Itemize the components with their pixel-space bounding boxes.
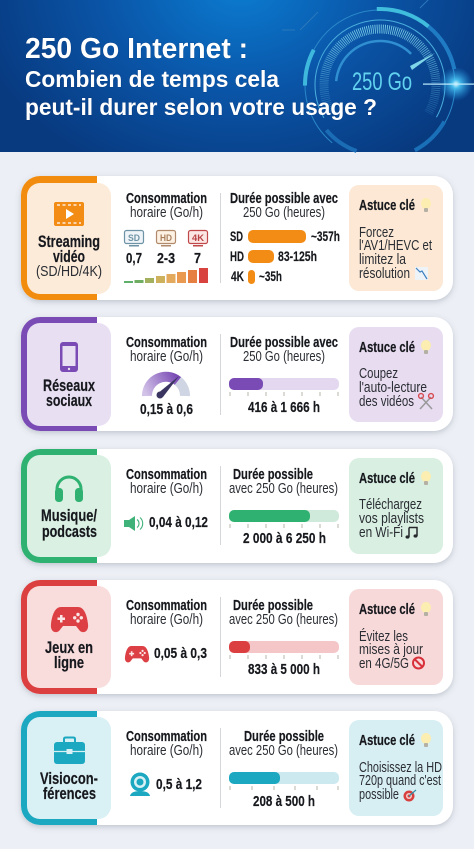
category label: sociaux	[46, 392, 93, 410]
header banner	[0, 0, 474, 192]
tip box: Astuce clé	[359, 602, 415, 618]
consumption heading: horaire (Go/h)	[130, 743, 203, 759]
category label	[40, 770, 98, 803]
duration heading: avec 250 Go (heures)	[229, 612, 338, 628]
duration heading	[229, 598, 338, 628]
consumption heading: Consommation	[126, 467, 207, 483]
bar chart: duration by quality: HD	[230, 249, 244, 264]
icon: smartphone	[60, 342, 78, 372]
consumption values: 0,7	[126, 250, 142, 267]
icon: small game controller	[125, 646, 149, 662]
category label: Musique/	[41, 507, 97, 525]
icon: briefcase	[54, 738, 85, 764]
tip box	[349, 589, 443, 685]
title	[25, 33, 377, 120]
title: peut-il durer selon votre usage ?	[25, 94, 377, 120]
duration heading: Durée possible avec	[230, 335, 338, 351]
category label: férences	[43, 785, 96, 803]
category label: podcasts	[42, 523, 97, 541]
tip box: l'auto-lecture	[359, 380, 427, 396]
category label	[43, 377, 96, 410]
icon: 4K screen	[188, 230, 208, 246]
icon: SD screen: SD	[128, 233, 140, 243]
panel: online games	[21, 580, 453, 694]
category label: ligne	[54, 654, 84, 672]
duration heading: Durée possible	[233, 598, 313, 614]
bar chart: duration by quality: ~35h	[259, 269, 282, 284]
tip box: Téléchargez	[359, 497, 422, 513]
tip box: Choisissez la HD	[359, 760, 442, 776]
consumption heading: Consommation	[126, 598, 207, 614]
consumption heading: horaire (Go/h)	[130, 481, 203, 497]
tip box: Forcez	[359, 225, 394, 241]
consumption value: 0,5 à 1,2	[156, 776, 202, 793]
tip box: Astuce clé	[359, 340, 415, 356]
icon: speaker	[124, 516, 143, 531]
icon: SD screen	[124, 230, 144, 246]
tip box: résolution	[359, 266, 410, 282]
category label: Jeux en	[45, 639, 93, 657]
duration heading: avec 250 Go (heures)	[229, 743, 338, 759]
range bar	[229, 510, 339, 528]
consumption values: 7	[194, 250, 201, 267]
duration value: 833 à 5 000 h	[248, 661, 320, 678]
tip box: 720p quand c'est	[359, 773, 441, 789]
icon: headphones	[55, 477, 83, 502]
category label: Streaming	[38, 233, 100, 251]
duration heading: Durée possible	[244, 729, 324, 745]
category tile	[27, 323, 111, 426]
category label	[45, 639, 93, 672]
glow point	[423, 67, 474, 101]
gauge needle	[410, 53, 435, 70]
range bar	[229, 772, 339, 790]
icon: film	[54, 202, 84, 226]
bar chart: duration by quality: ~357h	[311, 229, 340, 244]
consumption heading	[126, 335, 207, 365]
bar scale	[124, 268, 208, 283]
consumption value: 0,15 à 0,6	[140, 401, 193, 418]
category label: Visiocon-	[40, 770, 98, 788]
category label	[41, 507, 97, 541]
icon: target	[404, 790, 416, 802]
tip box: l'AV1/HEVC et	[359, 238, 432, 254]
range bar	[229, 378, 339, 396]
icon: game controller	[51, 607, 88, 632]
tip box: en Wi-Fi	[359, 525, 403, 541]
panel: video conferencing	[21, 711, 453, 825]
consumption heading: Consommation	[126, 335, 207, 351]
category tile	[27, 717, 111, 819]
icon: HD screen	[156, 230, 176, 246]
tip box: en 4G/5G	[359, 656, 409, 672]
tip box	[349, 185, 443, 291]
consumption heading	[126, 729, 207, 759]
duration value: 208 à 500 h	[253, 793, 315, 810]
tip box: des vidéos	[359, 394, 414, 410]
icon: 4K screen: 4K	[192, 233, 205, 243]
bar chart: duration by quality	[230, 229, 340, 284]
category tile	[27, 455, 111, 557]
consumption values	[126, 250, 201, 267]
duration heading: 250 Go (heures)	[243, 205, 325, 221]
consumption value: 0,04 à 0,12	[149, 514, 208, 531]
category label	[36, 233, 102, 280]
speedometer graphic	[273, 0, 474, 192]
range bar	[229, 641, 339, 659]
icon: music note	[406, 528, 418, 539]
tip box: Coupez	[359, 366, 398, 382]
duration heading: avec 250 Go (heures)	[229, 481, 338, 497]
icon: HD screen: HD	[160, 233, 172, 243]
tip box: possible	[359, 787, 399, 803]
consumption heading: horaire (Go/h)	[130, 612, 203, 628]
tip box: limitez la	[359, 252, 407, 268]
category label: (SD/HD/4K)	[36, 264, 102, 280]
icon: prohibited sign	[413, 658, 424, 668]
duration heading: Durée possible avec	[230, 191, 338, 207]
bar chart: duration by quality: 4K	[231, 269, 244, 284]
consumption heading	[126, 598, 207, 628]
consumption heading: horaire (Go/h)	[130, 349, 203, 365]
panel: social networks	[21, 317, 453, 431]
consumption value: 0,05 à 0,3	[154, 645, 207, 662]
consumption heading	[126, 467, 207, 497]
category label: Réseaux	[43, 377, 96, 395]
duration heading	[230, 191, 338, 221]
category tile	[27, 586, 111, 688]
consumption heading: Consommation	[126, 729, 207, 745]
tip box: Astuce clé	[359, 471, 415, 487]
tip box: Évitez les	[359, 628, 408, 645]
consumption values: 2-3	[157, 250, 175, 267]
tip box: vos playlists	[359, 511, 424, 527]
panel: streaming video	[21, 176, 453, 300]
tip box	[349, 720, 443, 816]
duration heading	[229, 729, 338, 759]
tip box: Astuce clé	[359, 198, 415, 214]
duration heading: 250 Go (heures)	[243, 349, 325, 365]
consumption heading	[126, 191, 207, 221]
icon: webcam	[130, 772, 150, 796]
title: Combien de temps cela	[25, 66, 280, 92]
tip box	[349, 458, 443, 554]
duration value: 2 000 à 6 250 h	[243, 530, 326, 547]
duration heading	[229, 467, 338, 497]
tip box: mises à jour	[359, 642, 423, 658]
duration heading: Durée possible	[233, 467, 313, 483]
bar chart: duration by quality: SD	[230, 229, 243, 244]
category tile	[27, 183, 111, 294]
icon: falling chart	[415, 267, 428, 280]
panel: music and podcasts	[21, 449, 453, 563]
tip box: Astuce clé	[359, 733, 415, 749]
category label: vidéo	[53, 248, 85, 266]
title: 250 Go Internet :	[25, 33, 248, 65]
icon: scissors	[419, 394, 433, 409]
tip box	[349, 327, 443, 422]
consumption heading: horaire (Go/h)	[130, 205, 203, 221]
duration heading	[230, 335, 338, 365]
gauge value: 250 Go	[352, 68, 412, 96]
gauge	[147, 376, 185, 398]
bar chart: duration by quality: 83-125h	[278, 249, 317, 264]
consumption heading: Consommation	[126, 191, 207, 207]
duration value: 416 à 1 666 h	[248, 399, 320, 416]
